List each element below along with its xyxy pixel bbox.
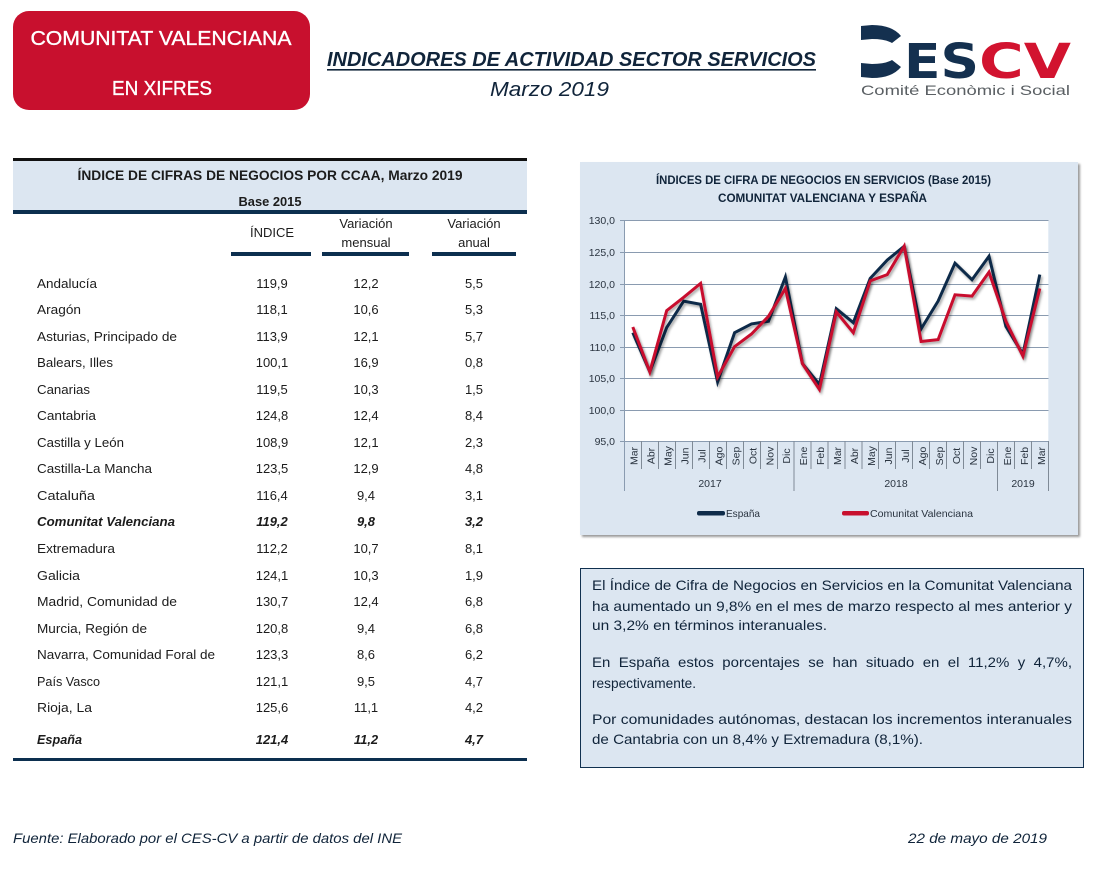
table rows: 3,1 [465,488,483,503]
table rows: 121,1 [256,674,288,689]
table rows: 119,5 [256,382,288,397]
y axis labels: 120,0 [589,279,615,291]
banner: Comunitat Valenciana en xifres [13,11,310,110]
y axis labels [589,215,615,448]
table rows: 10,3 [353,382,379,397]
x axis months and years: Abr [849,447,861,464]
table rows: 123,5 [256,461,288,476]
table rows: 6,8 [465,621,483,636]
table rows: Madrid, Comunidad de [37,594,177,609]
x axis months and years: Jul [900,449,912,463]
text box: commentary: respectivamente. [592,675,696,691]
title: Marzo 2019 [490,79,609,101]
y axis labels: 95,0 [595,436,615,448]
legend: Comunitat Valenciana [870,508,973,520]
table rows: Extremadura [37,541,116,556]
table rows: 130,7 [256,594,288,609]
table rows: 118,1 [256,302,288,317]
panel: line chart [580,162,1078,535]
column headings: Variación [447,216,501,231]
table rows: Castilla y León [37,435,124,450]
table rows: 116,4 [256,488,288,503]
x axis months and years: Dic [985,448,997,464]
x axis months and years: Mar [1036,446,1048,465]
y axis labels: 110,0 [590,342,615,354]
table header band: ÍNDICE DE CIFRAS DE NEGOCIOS POR CCAA, Marzo 2019 [78,167,463,183]
x axis months and years [628,441,1048,491]
table rows: 108,9 [256,435,288,450]
x axis months and years: Jul [696,449,708,463]
column headings: ÍNDICE [250,225,294,240]
text box: commentary: Por comunidades autónomas, destacan los incrementos interanuales [592,711,1072,727]
table rows: 9,5 [357,674,375,689]
x axis months and years: Jun [883,447,895,464]
y axis labels: 115,0 [590,310,615,322]
table rows: 12,9 [353,461,379,476]
x axis months and years: Ene [798,447,810,465]
table rows: 5,7 [465,329,483,344]
text box: commentary [580,568,1084,768]
text box: commentary: un 3,2% en términos interanuales. [592,617,827,633]
table rows: Asturias, Principado de [37,329,177,344]
table rows: 4,2 [465,700,483,715]
table rows: 5,3 [465,302,483,317]
x axis months and years: May [662,445,674,466]
table rows: Murcia, Región de [37,621,147,636]
y axis labels: 105,0 [589,373,615,385]
table rows: Balears, Illes [37,355,114,370]
series: Comunitat Valenciana [633,246,1040,390]
x axis months and years: May [866,445,878,466]
table rows: 10,3 [353,568,379,583]
table rows [37,276,484,747]
table rows: 8,6 [357,647,375,662]
x axis months and years: Nov [764,446,776,465]
table rows: 124,1 [256,568,288,583]
table rows: 10,7 [353,541,379,556]
table rows: 10,6 [353,302,379,317]
table rows: Navarra, Comunidad Foral de [37,647,215,662]
table rows: Canarias [37,382,91,397]
table rows: Cantabria [37,408,97,423]
table rows: 16,9 [353,355,379,370]
text box: commentary: En España estos porcentajes se han situado en el 11,2% y 4,7%, [592,654,1072,670]
x axis months and years: Ago [714,447,726,465]
x axis months and years: Ago [917,447,929,465]
table rows: 4,7 [465,674,483,689]
table rows: 12,4 [353,594,379,609]
table rows: 113,9 [256,329,288,344]
table rows: 2,3 [465,435,483,450]
table rows: 6,2 [465,647,483,662]
column headings: Variación [339,216,393,231]
table rows: 12,2 [353,276,379,291]
title: INDICADORES DE ACTIVIDAD SECTOR SERVICIOS [327,49,817,71]
table rows: 11,1 [354,700,378,715]
table rows: Aragón [37,302,81,317]
table rows: 120,8 [256,621,288,636]
legend [697,508,973,520]
table rows: Comunitat Valenciana [37,514,175,529]
table rows: 100,1 [256,355,288,370]
table rows: 1,5 [465,382,483,397]
table rows: 12,4 [353,408,379,423]
x axis months and years: Sep [934,447,946,465]
table rows: 119,2 [256,514,289,529]
legend: España [726,508,760,520]
x axis months and years: 2018 [884,478,908,490]
table rows: 124,8 [256,408,288,423]
chart title [656,174,991,205]
table rows: Rioja, La [37,700,93,715]
table rows: España [37,732,82,747]
footer: source: Fuente: Elaborado por el CES-CV a partir de datos del INE [13,830,403,846]
x axis months and years: Mar [832,446,844,465]
table rows: 4,7 [464,732,484,747]
logo: CES-CV: CV [979,34,1071,90]
table rows: 12,1 [353,435,379,450]
x axis months and years: Abr [646,447,658,464]
table rows: 8,4 [465,408,483,423]
x axis months and years: Dic [781,448,793,464]
logo: CES-CV [861,25,1071,98]
table rows: 112,2 [256,541,288,556]
table rows: 3,2 [465,514,484,529]
table rows: 9,4 [357,488,375,503]
y axis labels: 100,0 [589,405,615,417]
text box: commentary: El Índice de Cifra de Negocios en Servicios en la Comunitat Valenciana [592,577,1072,593]
x axis months and years: Feb [815,447,827,465]
table rows: Galicia [37,568,81,583]
chart title: COMUNITAT VALENCIANA Y ESPAÑA [718,192,927,205]
title [327,49,817,101]
table rows: 11,2 [354,732,379,747]
series: España [633,246,1040,384]
x axis months and years: 2019 [1011,478,1035,490]
table rows: 8,1 [465,541,483,556]
table rows: 12,1 [353,329,379,344]
table rows: 1,9 [465,568,483,583]
table rows: 6,8 [465,594,483,609]
x axis months and years: Jun [680,447,692,464]
panel: table of CCAA [13,158,527,761]
x axis months and years: Nov [968,446,980,465]
column headings: anual [458,235,490,250]
table rows: 121,4 [256,732,289,747]
x axis months and years: Mar [628,446,640,465]
table rows: 123,3 [256,647,288,662]
logo: CES-CV: ES [904,34,979,90]
x axis months and years: Oct [951,448,963,464]
banner: Comunitat Valenciana en xifres: COMUNITAT VALENCIANA [30,28,292,50]
table rows: 9,8 [357,514,376,529]
table rows: Cataluña [37,488,96,503]
table rows: 5,5 [465,276,483,291]
column headings: mensual [341,235,391,250]
x axis months and years: 2017 [698,478,722,490]
table rows: 0,8 [465,355,483,370]
footer: date: 22 de mayo de 2019 [907,830,1047,846]
x axis months and years: Sep [730,447,742,465]
table header band [13,158,527,214]
x axis months and years: Ene [1002,447,1014,465]
chart title: ÍNDICES DE CIFRA DE NEGOCIOS EN SERVICIOS (Base 2015) [656,174,991,187]
table header band: Base 2015 [238,195,302,209]
table rows: 119,9 [256,276,288,291]
text box: commentary: de Cantabria con un 8,4% y Extremadura (8,1%). [592,731,923,747]
text box: commentary: ha aumentado un 9,8% en el mes de marzo respecto al mes anterior y [592,598,1072,614]
banner: Comunitat Valenciana en xifres: EN XIFRES [112,78,212,100]
x axis months and years: Feb [1019,447,1031,465]
y axis labels: 130,0 [589,215,615,227]
y axis labels: 125,0 [589,247,615,259]
table rows: Castilla-La Mancha [37,461,153,476]
table rows: Andalucía [37,276,98,291]
logo: CES-CV: Comité Econòmic i Social [861,82,1070,98]
table rows: 125,6 [256,700,288,715]
plot area and gridlines [620,220,1048,491]
table rows: 9,4 [357,621,375,636]
table rows: País Vasco [37,674,100,689]
table rows: 4,8 [465,461,483,476]
x axis months and years: Oct [748,448,760,464]
column headings [231,216,516,256]
